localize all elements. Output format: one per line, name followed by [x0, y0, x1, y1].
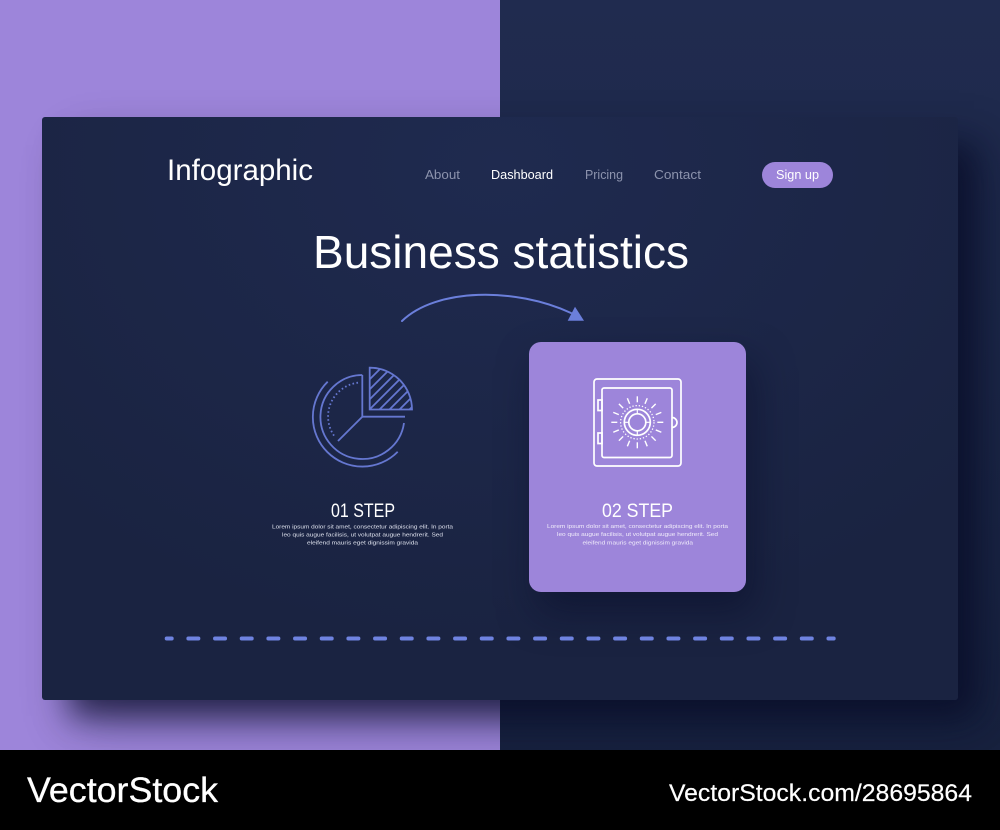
step 1 text: 01 STEP: [331, 501, 395, 522]
footer bar: [0, 750, 1000, 830]
navigation: Contact: [654, 167, 701, 182]
sign up button: [762, 162, 833, 188]
page content overlay: [27, 158, 972, 802]
step 2 text: 02 STEP: [602, 501, 673, 522]
icon: safe: [594, 379, 681, 466]
step 2 text: eleifend mauris eget dignissim gravida: [582, 540, 694, 546]
footer brand: VectorStock: [27, 771, 219, 810]
step 2 text: [547, 501, 729, 546]
navigation: Pricing: [585, 167, 623, 182]
arrow: [402, 295, 584, 321]
step 1 text: Lorem ipsum dolor sit amet, consectetur adipiscing elit. In porta: [272, 524, 454, 530]
navigation: About: [425, 167, 460, 182]
step 1 text: [272, 501, 454, 546]
icon: pie chart: [312, 366, 413, 468]
step 2 text: leo quis augue facilisis, ut volutpat augue hendrerit. Sed: [557, 532, 718, 538]
sign up button: Sign up: [776, 167, 819, 182]
panel content: [167, 154, 834, 638]
background: navy right half: [500, 0, 1000, 750]
step 1 text: leo quis augue facilisis, ut volutpat augue hendrerit. Sed: [282, 532, 443, 538]
navigation: Dashboard: [491, 167, 553, 182]
panel: main surface: [42, 117, 958, 700]
dashed line: [167, 636, 834, 640]
footer url: VectorStock.com/28695864: [669, 780, 972, 807]
step 2 text: Lorem ipsum dolor sit amet, consectetur adipiscing elit. In porta: [547, 524, 729, 530]
step 2 card content: [547, 379, 729, 546]
panel: step 2 card surface: [529, 342, 746, 592]
title: Business statistics: [313, 226, 689, 278]
navigation: [425, 167, 701, 182]
step 1 text: eleifend mauris eget dignissim gravida: [307, 540, 419, 546]
logo: Infographic: [167, 154, 313, 187]
